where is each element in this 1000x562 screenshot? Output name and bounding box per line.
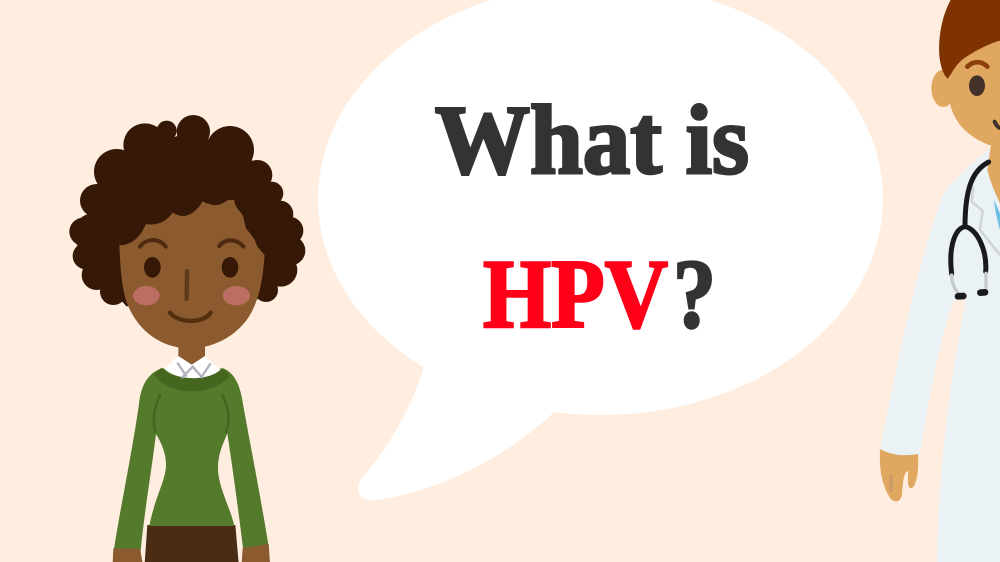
woman character <box>69 115 305 562</box>
face <box>950 33 1000 148</box>
hair <box>939 0 1000 79</box>
eyebrows <box>140 240 243 247</box>
doctor character <box>880 0 1000 562</box>
hair back <box>69 115 305 307</box>
ear <box>931 70 955 107</box>
doctor coat <box>880 140 1000 562</box>
text: What is: What is <box>435 86 749 195</box>
collar <box>164 357 221 378</box>
speech bubble <box>318 0 883 500</box>
eyebrow <box>967 62 987 67</box>
neck <box>178 340 205 365</box>
shirt <box>994 200 1000 230</box>
skirt <box>145 525 239 562</box>
mouth <box>995 122 1000 128</box>
sweater seams <box>154 395 229 432</box>
text: HPV: HPV <box>483 240 668 349</box>
eye <box>969 75 985 96</box>
stethoscope <box>951 162 989 296</box>
nose <box>180 271 193 299</box>
eyes <box>144 257 161 278</box>
hair fringe <box>117 150 268 257</box>
neck <box>987 140 1000 203</box>
mouth <box>170 313 211 321</box>
doctor hand <box>880 449 918 501</box>
woman body <box>113 340 270 562</box>
face <box>119 200 265 348</box>
text: question mark: ? <box>673 240 716 349</box>
lapel <box>972 187 1000 255</box>
cheeks <box>133 286 160 305</box>
neckline <box>154 368 230 391</box>
hands <box>113 544 270 562</box>
sweater <box>114 368 269 551</box>
woman head <box>69 115 305 348</box>
doctor head <box>931 0 1000 296</box>
heading: What is HPV? <box>435 86 749 349</box>
